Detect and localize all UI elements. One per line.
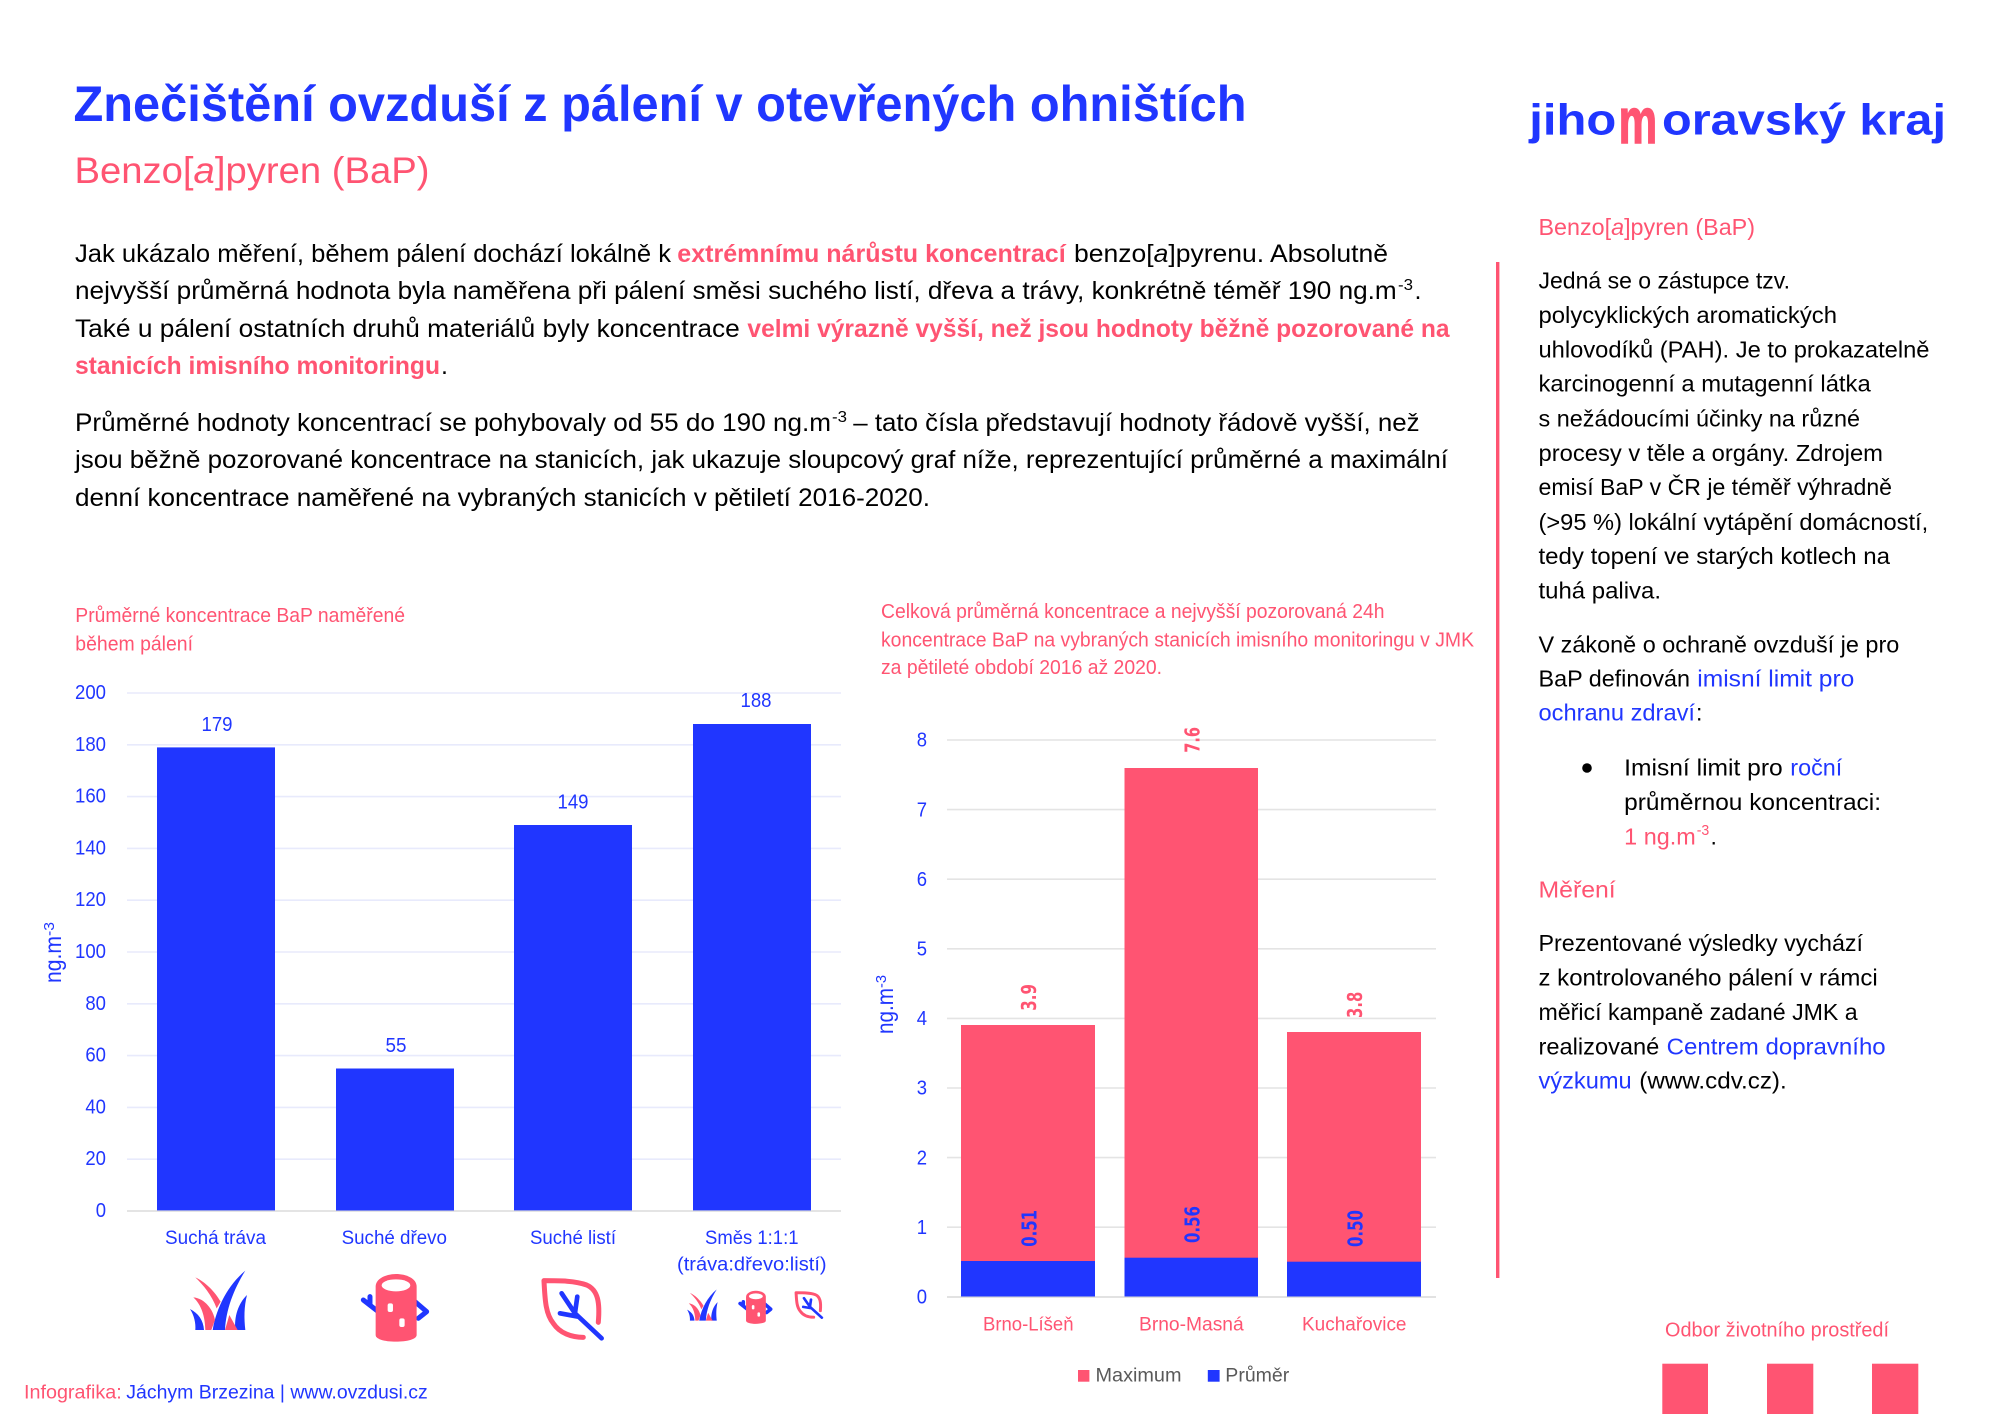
y axis labels: 8 <box>917 729 927 752</box>
y axis labels: 120 <box>75 888 106 911</box>
y axis labels: 60 <box>85 1044 106 1067</box>
text block: intro paragraph 1: Jak ukázalo měření, během pálení dochází lokálně k <box>75 240 672 268</box>
text block: intro paragraph 1: velmi výrazně vyšší, než jsou hodnoty běžně pozorované na <box>747 315 1451 343</box>
bullet: annual limit: . <box>1710 823 1717 849</box>
panel: left chart heading: Průměrné koncentrace BaP naměřené <box>75 605 405 627</box>
legend: Maximum <box>1096 1366 1182 1387</box>
average bars <box>961 1258 1421 1296</box>
heading: measurement: Měření <box>1538 877 1616 903</box>
text block: legal limit: imisní limit pro <box>1697 666 1854 692</box>
text block: intro paragraph 2: Průměrné hodnoty koncentrací se pohybovaly od 55 do 190 ng.m <box>75 409 831 437</box>
y axis gridlines <box>947 740 1436 1297</box>
average value labels <box>1018 1206 1367 1247</box>
text block: measurement description: Prezentované výsledky vychází <box>1538 930 1864 956</box>
y axis title: -3 <box>873 975 890 988</box>
category labels <box>165 1228 827 1276</box>
legend: Průměr <box>1225 1366 1290 1387</box>
maximum value labels: 7.6 <box>1181 727 1205 753</box>
text block: intro paragraph 2: -3 <box>832 409 847 426</box>
divider line <box>1496 262 1499 1278</box>
panel: left chart heading: během pálení <box>75 634 193 656</box>
footer: department <box>1662 1320 1918 1414</box>
text block: legal limit: : <box>1696 700 1702 726</box>
text block: BaP description: tedy topení ve starých kotlech na <box>1538 543 1890 569</box>
logo: jihomoravský kraj <box>1528 85 1946 157</box>
average value labels: 0.50 <box>1343 1210 1367 1247</box>
bullet: annual limit: 1 ng.m <box>1624 823 1696 849</box>
y axis labels: 7 <box>917 798 927 821</box>
bullet: annual limit: Imisní limit pro <box>1624 755 1783 781</box>
panel: sidebar <box>1538 214 1930 1093</box>
maximum bars <box>961 768 1421 1262</box>
bullet: annual limit: průměrnou koncentraci: <box>1624 789 1881 815</box>
text block: BaP description: s nežádoucími účinky na různé <box>1538 405 1860 431</box>
icon: leaf <box>544 1281 602 1338</box>
text block: measurement description: (www.cdv.cz). <box>1639 1067 1787 1093</box>
category labels: Kuchařovice <box>1302 1315 1406 1336</box>
text block: intro paragraph 1: stanicích imisního monitoringu <box>75 352 440 380</box>
category labels: Brno-Masná <box>1139 1315 1244 1336</box>
bullet: annual limit: roční <box>1790 755 1843 781</box>
bar chart: stations average and maximum <box>872 727 1436 1387</box>
icon: mix of grass, log and leaf <box>687 1289 822 1324</box>
category labels: Brno-Líšeň <box>983 1315 1074 1336</box>
footer: department: Odbor životního prostředí <box>1665 1320 1889 1342</box>
y axis labels: 20 <box>85 1147 106 1170</box>
bars <box>157 724 811 1210</box>
maximum value labels <box>1017 727 1367 1018</box>
text block: intro paragraph 2: jsou běžně pozorované koncentrace na stanicích, jak ukazuje sloupcový graf níže, reprezentující průměrné a maximální <box>74 446 1448 474</box>
text block: intro paragraph 1 <box>75 240 1451 380</box>
average value labels: 0.56 <box>1181 1206 1205 1243</box>
text block: BaP description: polycyklických aromatických <box>1538 302 1837 328</box>
y axis labels: 5 <box>917 938 927 960</box>
bar value labels <box>202 690 772 1057</box>
text block: BaP description <box>1538 267 1930 603</box>
bar value labels: 179 <box>202 714 232 736</box>
panel: left chart heading <box>75 605 405 656</box>
text block: measurement description: měřicí kampaně zadané JMK a <box>1538 999 1858 1025</box>
y axis gridlines <box>127 693 841 1211</box>
icon: grass <box>190 1271 247 1330</box>
subtitle: Benzo[a]pyren (BaP) <box>74 150 430 191</box>
y axis labels: 40 <box>85 1095 106 1118</box>
y axis labels: 6 <box>917 868 927 891</box>
y axis labels: 160 <box>75 785 106 808</box>
text block: measurement description: z kontrolovaného pálení v rámci <box>1538 965 1878 991</box>
text block: measurement description: realizované <box>1538 1033 1659 1059</box>
logo: jihomoravský kraj: jiho <box>1528 95 1616 144</box>
y axis labels: 3 <box>917 1077 927 1100</box>
y axis labels: 200 <box>75 681 106 704</box>
text block: measurement description <box>1538 930 1886 1093</box>
y axis labels: 80 <box>85 992 106 1015</box>
category labels: Směs 1:1:1 <box>705 1228 798 1249</box>
y axis labels: 2 <box>917 1146 927 1169</box>
logo: jihomoravský kraj: m <box>1619 85 1657 157</box>
category labels: Suchá tráva <box>165 1228 266 1249</box>
y axis labels: 4 <box>917 1007 927 1030</box>
y axis labels: 0 <box>917 1286 927 1308</box>
text block: intro paragraph 2: denní koncentrace naměřené na vybraných stanicích v pětiletí 2016-2020. <box>75 484 930 512</box>
text block: measurement description: výzkumu <box>1538 1067 1632 1093</box>
text block: BaP description: (>95 %) lokální vytápění domácností, <box>1538 509 1928 535</box>
text block: intro paragraph 1: . <box>1414 277 1421 305</box>
bullet: annual limit <box>1582 755 1881 849</box>
text block: BaP description: emisí BaP v ČR je téměř výhradně <box>1538 473 1892 500</box>
text block: intro paragraph 1: benzo[a]pyrenu. Absolutně <box>1074 240 1388 268</box>
panel: right chart heading <box>881 601 1475 679</box>
text block: BaP description: uhlovodíků (PAH). Je to prokazatelně <box>1538 336 1930 362</box>
y axis labels <box>917 729 927 1308</box>
panel: right chart heading: Celková průměrná koncentrace a nejvyšší pozorovaná 24h <box>881 601 1384 623</box>
average value labels: 0.51 <box>1018 1210 1042 1247</box>
bullet: annual limit: -3 <box>1697 822 1709 839</box>
text block: intro paragraph 2 <box>74 409 1448 512</box>
text block: measurement description: Centrem dopravního <box>1667 1033 1886 1059</box>
text block: BaP description: procesy v těle a orgány. Zdrojem <box>1538 440 1883 466</box>
text block: intro paragraph 1: nejvyšší průměrná hodnota byla naměřena při pálení směsi suchého listí, dřeva a trávy, konkrétně téměř 190 ng.m <box>75 277 1397 305</box>
y axis labels: 1 <box>917 1216 927 1239</box>
text block: legal limit: V zákoně o ochraně ovzduší je pro <box>1538 631 1899 657</box>
text block: legal limit <box>1538 631 1899 726</box>
text block: intro paragraph 1: extrémnímu nárůstu koncentrací <box>677 240 1067 268</box>
panel: right chart heading: koncentrace BaP na vybraných stanicích imisního monitoringu v JMK <box>881 630 1475 652</box>
icon: wood log <box>363 1274 427 1342</box>
y axis labels: 140 <box>75 836 106 859</box>
text block: intro paragraph 1: -3 <box>1398 277 1413 294</box>
text block: legal limit: ochranu zdraví <box>1538 700 1696 726</box>
credit: Jáchym Brzezina | www.ovzdusi.cz <box>126 1382 428 1403</box>
y axis title: -3 <box>41 922 58 936</box>
small log <box>740 1291 771 1324</box>
category labels <box>983 1315 1406 1336</box>
text block: BaP description: Jedná se o zástupce tzv. <box>1538 267 1790 293</box>
y axis labels: 0 <box>96 1199 106 1222</box>
text block: BaP description: tuhá paliva. <box>1538 577 1661 603</box>
logo: jihomoravský kraj: oravský kraj <box>1662 95 1946 144</box>
title: Znečištění ovzduší z pálení v otevřených ohništích <box>74 76 1246 132</box>
credit: Infografika: <box>24 1382 122 1403</box>
bar chart: average concentrations during burning <box>40 681 841 1276</box>
small leaf <box>796 1293 822 1318</box>
text block: legal limit: BaP definován <box>1538 666 1690 692</box>
y axis labels: 180 <box>75 733 106 756</box>
category labels: Suché listí <box>530 1228 617 1249</box>
small grass <box>687 1289 718 1321</box>
category labels: (tráva:dřevo:listí) <box>677 1255 827 1276</box>
bar value labels: 149 <box>558 792 588 814</box>
text block: intro paragraph 2: – tato čísla představují hodnoty řádově vyšší, než <box>853 409 1420 437</box>
text block: intro paragraph 1: . <box>441 352 448 380</box>
bar value labels: 55 <box>386 1035 406 1057</box>
y axis title: ng.m <box>872 988 898 1034</box>
maximum value labels: 3.9 <box>1017 984 1041 1011</box>
bar value labels: 188 <box>740 690 772 712</box>
maximum value labels: 3.8 <box>1343 992 1367 1018</box>
y axis labels: 100 <box>75 940 106 963</box>
legend <box>1078 1366 1290 1387</box>
panel: right chart heading: za pětileté období 2016 až 2020. <box>881 657 1162 679</box>
text block: BaP description: karcinogenní a mutagenní látka <box>1538 371 1871 397</box>
y axis title: ng.m <box>40 936 66 983</box>
heading: BaP: Benzo[a]pyren (BaP) <box>1538 214 1755 240</box>
y axis labels <box>75 681 106 1222</box>
text block: intro paragraph 1: Také u pálení ostatních druhů materiálů byly koncentrace <box>75 315 740 343</box>
category labels: Suché dřevo <box>342 1228 447 1249</box>
